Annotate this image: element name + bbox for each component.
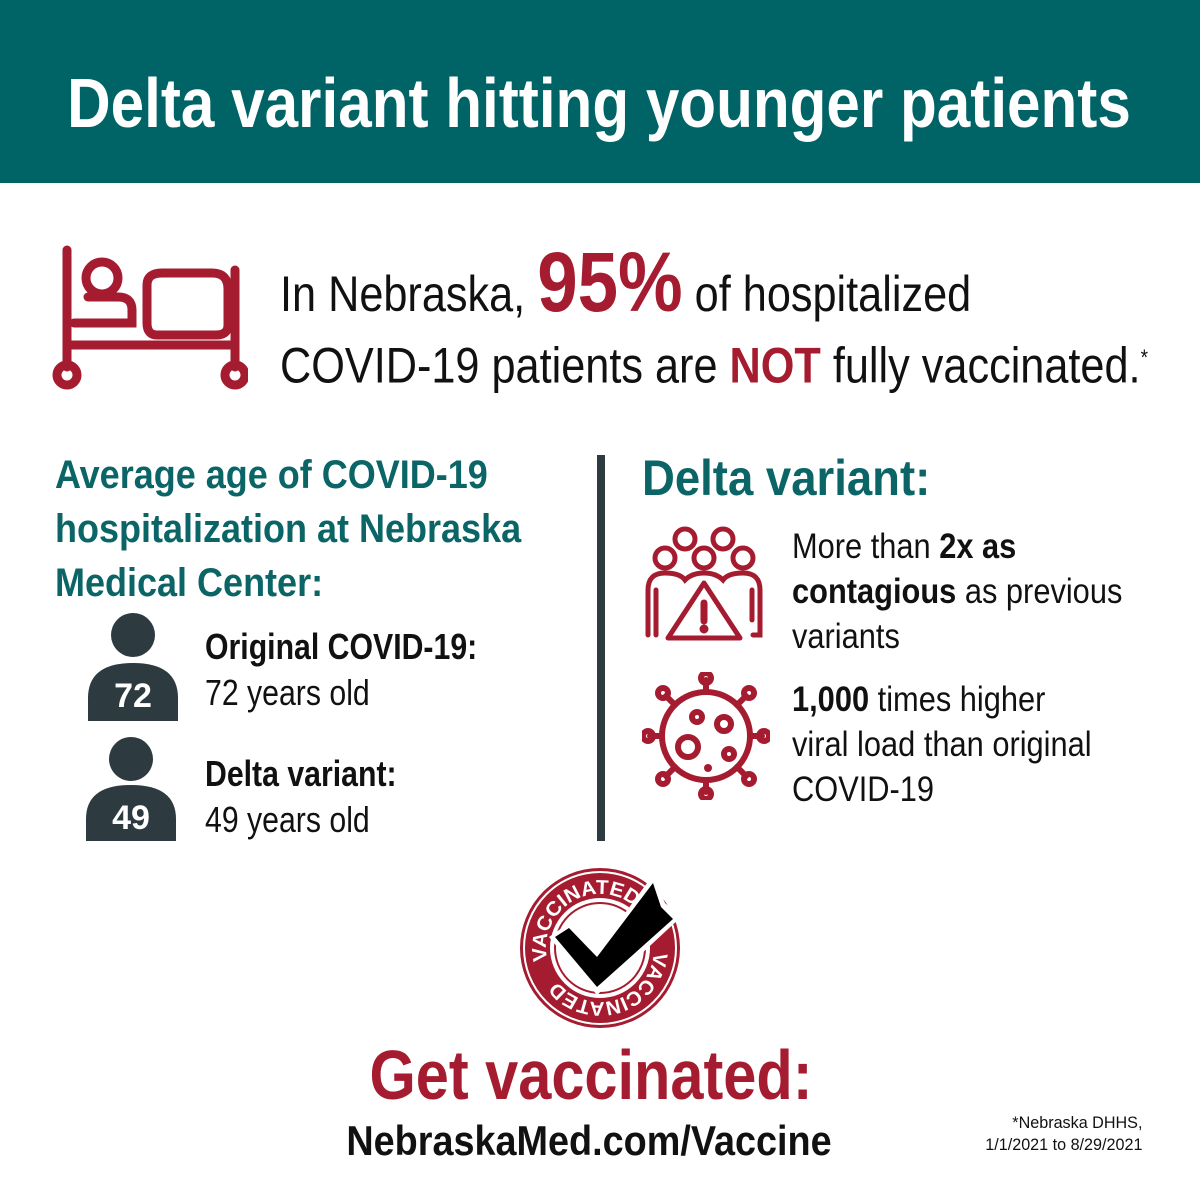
- text: delta age: Delta variant:: [205, 753, 397, 794]
- text: contagious: [792, 527, 1122, 656]
- divider: [597, 455, 605, 841]
- main statistic text: [280, 235, 1148, 394]
- main statistic text: In Nebraska, 95% of hospitalized: [280, 235, 971, 329]
- heading: delta variant: Delta variant:: [642, 450, 930, 506]
- text: contagious: contagious as previous: [792, 572, 1122, 611]
- footnote: 1/1/2021 to 8/29/2021: [985, 1135, 1142, 1154]
- heading: average age: hospitalization at Nebraska: [55, 507, 521, 551]
- text: delta age: [205, 753, 397, 840]
- text: viral load: 1,000 times higher: [792, 680, 1045, 719]
- icon: people warning: [646, 526, 762, 640]
- footnote: *Nebraska DHHS,: [1012, 1113, 1142, 1132]
- title: Delta variant hitting younger patients: [67, 64, 1131, 142]
- call to action: Get vaccinated:: [369, 1036, 813, 1114]
- text: contagious: More than 2x as: [792, 527, 1016, 566]
- icon: vaccinated stamp: [520, 868, 680, 1028]
- heading: average age: Medical Center:: [55, 561, 323, 605]
- icon: person 72: 72: [114, 677, 152, 715]
- icon: vaccinated stamp: VACCINATED: [532, 880, 639, 962]
- icon: person 49: [86, 737, 176, 841]
- url: NebraskaMed.com/Vaccine: [346, 1117, 832, 1164]
- heading: average age: Average age of COVID-19: [55, 453, 488, 497]
- icon: hospital bed: [52, 246, 248, 390]
- footnote: [985, 1113, 1142, 1154]
- heading: average age: [55, 453, 522, 605]
- main statistic text: COVID-19 patients are NOT fully vaccinated.*: [280, 338, 1148, 394]
- text: delta age: 49 years old: [205, 799, 370, 840]
- text: contagious: variants: [792, 617, 900, 656]
- text: viral load: [792, 680, 1092, 809]
- text: original age: 72 years old: [205, 672, 370, 713]
- text: viral load: viral load than original: [792, 725, 1092, 764]
- text: original age: [205, 626, 477, 713]
- text: viral load: COVID-19: [792, 770, 934, 809]
- icon: person 72: [88, 613, 178, 721]
- text: original age: Original COVID-19:: [205, 626, 477, 667]
- icon: vaccinated stamp: VACCINATED: [550, 954, 668, 1016]
- icon: person 49: 49: [112, 799, 150, 837]
- header banner: [0, 0, 1200, 183]
- icon: virus: [642, 672, 770, 800]
